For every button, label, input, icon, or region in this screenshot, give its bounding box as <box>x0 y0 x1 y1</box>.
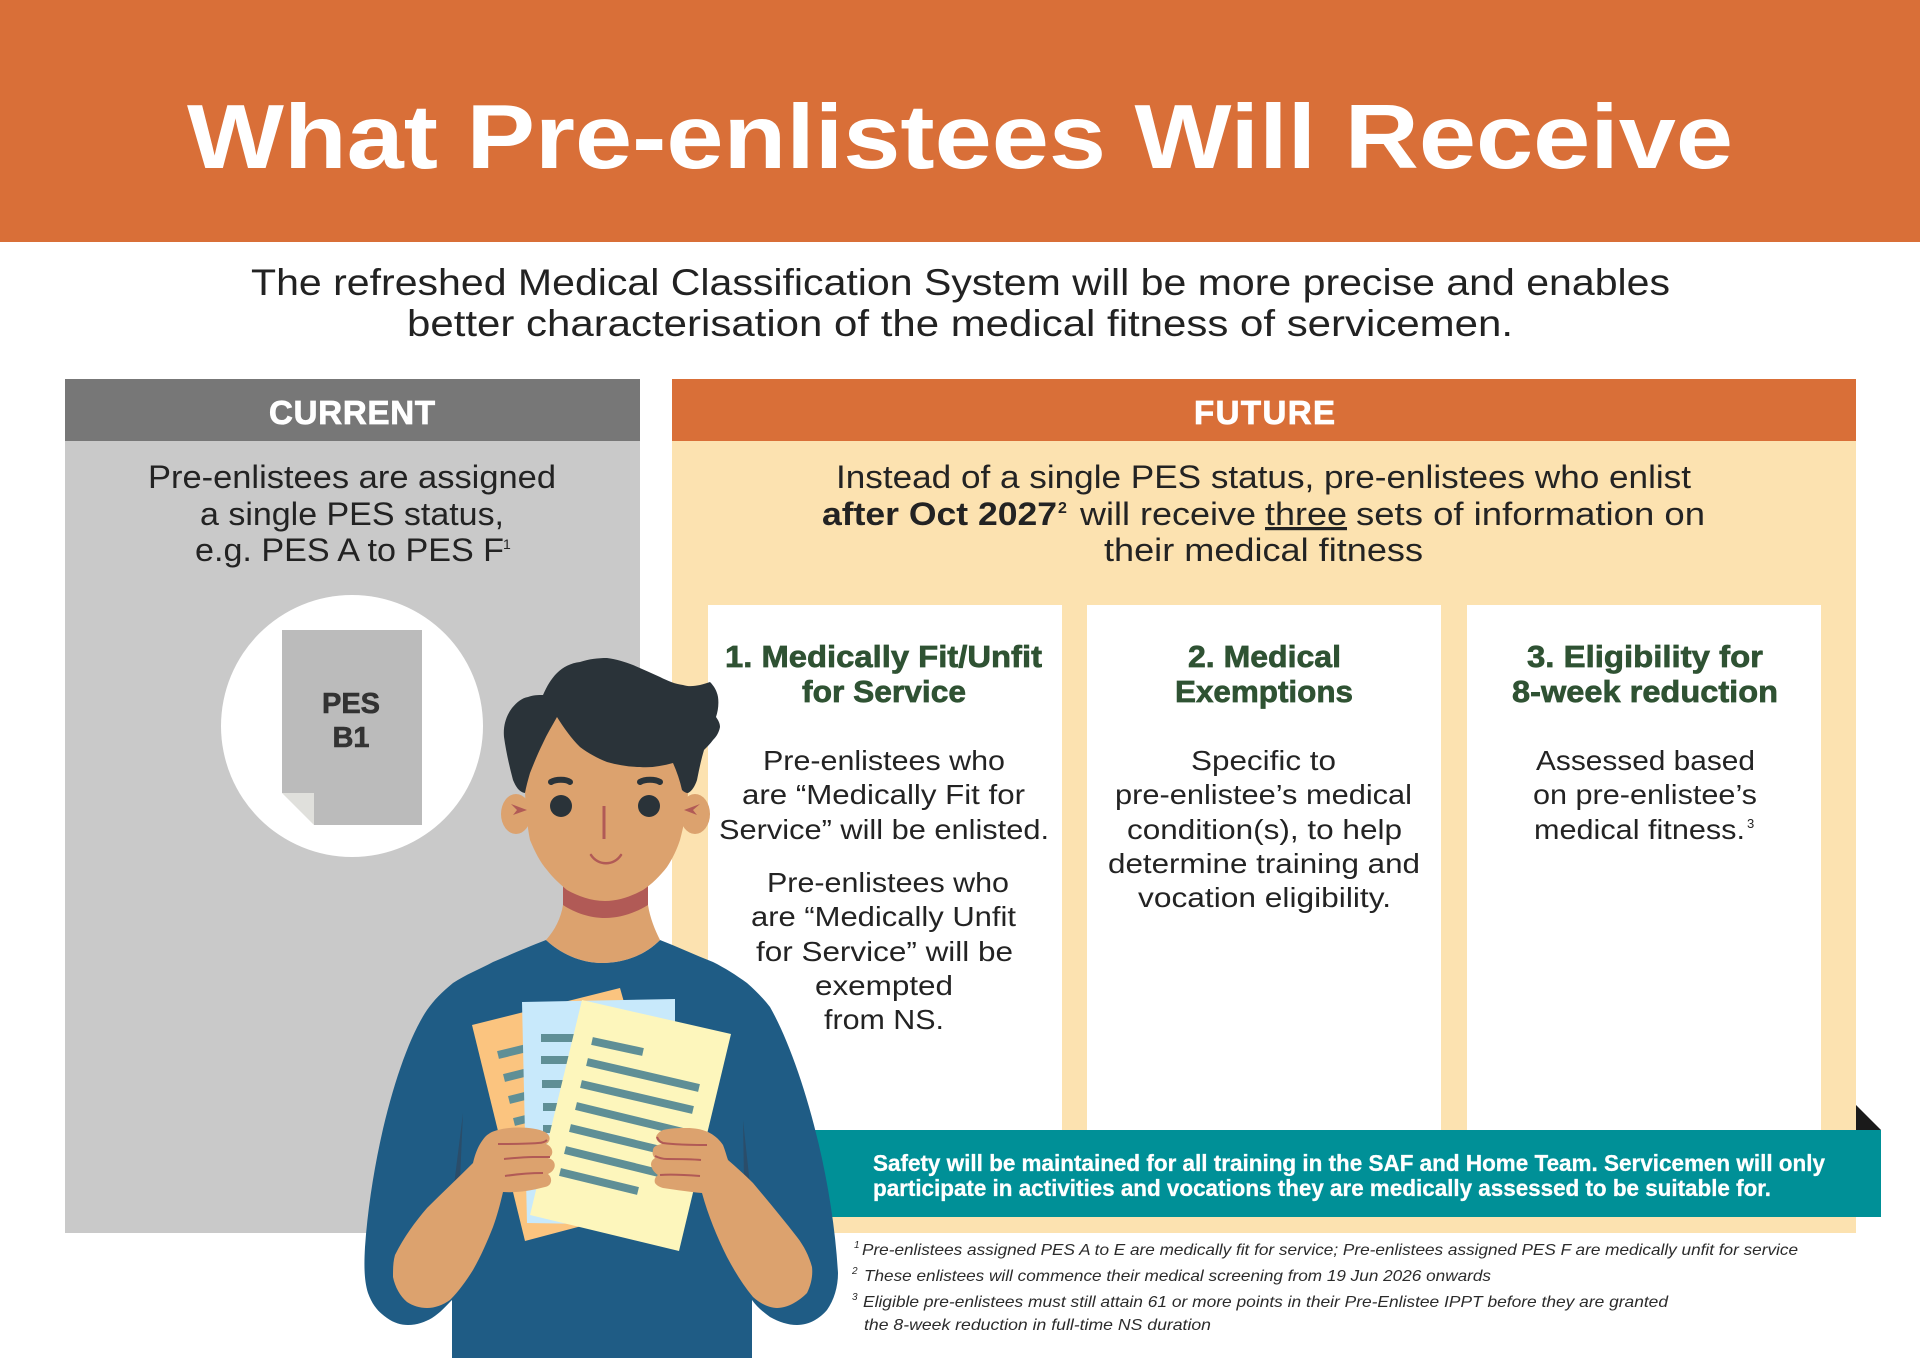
right hand and arm <box>651 1128 812 1308</box>
footnotes: Pre-enlistees assigned PES A to E are medically fit for service; Pre-enlistees assigned PES F are medically unfit for service <box>862 1242 1798 1259</box>
neck <box>546 880 660 963</box>
icon: banner fold <box>1856 1105 1881 1130</box>
card 1: medically fit or unfit: for Service” will be <box>756 936 1013 967</box>
title banner <box>0 0 1920 242</box>
mouth <box>591 855 621 863</box>
icon: PES document in circle: PES <box>322 688 380 720</box>
card 1: medically fit or unfit: 1. Medically Fit/Unfit <box>725 639 1042 674</box>
future description <box>822 459 1705 568</box>
subtitle <box>251 262 1670 344</box>
card 1: medically fit or unfit: from NS. <box>824 1004 944 1035</box>
footnotes: These enlistees will commence their medical screening from 19 Jun 2026 onwards <box>864 1268 1491 1285</box>
nose <box>602 806 606 839</box>
current header: CURRENT <box>269 394 435 431</box>
card 3: eligibility for 8-week reduction <box>1467 605 1821 1130</box>
current description <box>148 459 556 568</box>
title: What Pre-enlistees Will Receive <box>187 87 1733 188</box>
panel: future <box>672 379 1856 1233</box>
card 1: medically fit or unfit: Pre-enlistees who <box>767 867 1009 898</box>
card 1: medically fit or unfit: Service” will be enlisted. <box>719 814 1049 845</box>
future description: Instead of a single PES status, pre-enlistees who enlist <box>836 459 1691 495</box>
document: orange sheet <box>472 988 680 1241</box>
card 2: medical exemptions: 2. Medical <box>1188 639 1341 674</box>
card 1: medically fit or unfit: are “Medically Fit for <box>742 779 1025 810</box>
footnotes: 2 <box>851 1266 858 1277</box>
card 3: eligibility for 8-week reduction: Assessed based <box>1536 745 1755 776</box>
card 1: medically fit or unfit: are “Medically Unfit <box>751 901 1016 932</box>
callout: safety banner <box>800 1130 1881 1217</box>
future description: sets of information on <box>1356 496 1705 532</box>
card 3: eligibility for 8-week reduction: 3. Eligibility for <box>1527 639 1763 674</box>
future description: their medical fitness <box>1104 532 1423 568</box>
future header: FUTURE <box>1194 394 1335 431</box>
footnotes: 1 <box>854 1240 860 1251</box>
document: blue sheet <box>522 999 675 1225</box>
eyes <box>550 795 660 817</box>
card 3: eligibility for 8-week reduction: medical fitness. <box>1534 814 1745 845</box>
card 2: medical exemptions: Exemptions <box>1175 674 1353 709</box>
footnotes: the 8-week reduction in full-time NS duration <box>864 1317 1211 1334</box>
card 3: eligibility for 8-week reduction: on pre-enlistee’s <box>1533 779 1757 810</box>
callout: safety banner: Safety will be maintained for all training in the SAF and Home Team. Servicemen will only <box>873 1150 1825 1176</box>
icon: PES document in circle: B1 <box>332 722 370 754</box>
footnotes: Eligible pre-enlistees must still attain 61 or more points in their Pre-Enlistee IPPT before they are granted <box>863 1294 1669 1311</box>
future description: 2 <box>1058 500 1067 517</box>
document: yellow sheet <box>530 1000 731 1251</box>
panel: current <box>65 379 640 1233</box>
card 2: medical exemptions <box>1087 605 1441 1130</box>
card 2: medical exemptions: condition(s), to help <box>1127 814 1402 845</box>
card 3: eligibility for 8-week reduction: 8-week reduction <box>1512 674 1778 709</box>
current description: 1 <box>503 536 511 552</box>
card 1: medically fit or unfit: Pre-enlistees who <box>763 745 1005 776</box>
card 2: medical exemptions: vocation eligibility. <box>1138 882 1391 913</box>
subtitle: better characterisation of the medical fitness of servicemen. <box>407 303 1513 344</box>
callout: safety banner: participate in activities and vocations they are medically assessed to be suitable for. <box>873 1175 1771 1201</box>
current description: Pre-enlistees are assigned <box>148 459 556 495</box>
left hand and arm <box>393 1128 555 1308</box>
current description: e.g. PES A to PES F <box>195 532 504 568</box>
subtitle: The refreshed Medical Classification System will be more precise and enables <box>251 262 1670 303</box>
future header <box>672 379 1856 441</box>
icon: PES document in circle <box>221 595 483 857</box>
illustration: person holding documents <box>364 658 838 1358</box>
hair <box>504 658 720 793</box>
current description: a single PES status, <box>200 496 504 532</box>
footnotes: 3 <box>852 1292 858 1303</box>
collar shadow <box>563 880 648 918</box>
card 2: medical exemptions: determine training and <box>1108 848 1420 879</box>
face <box>525 700 688 901</box>
future description: three <box>1265 496 1347 532</box>
shirt <box>364 940 838 1358</box>
card 2: medical exemptions: pre-enlistee’s medical <box>1115 779 1412 810</box>
card 2: medical exemptions: Specific to <box>1191 745 1336 776</box>
card 1: medically fit or unfit <box>708 605 1062 1130</box>
card 1: medically fit or unfit: exempted <box>815 970 953 1001</box>
card 3: eligibility for 8-week reduction: 3 <box>1747 816 1754 831</box>
inner ear marks <box>511 804 700 815</box>
current header <box>65 379 640 441</box>
footnotes <box>851 1240 1798 1334</box>
ears <box>501 794 710 834</box>
future description: will receive <box>1079 496 1256 532</box>
card 1: medically fit or unfit: for Service <box>802 674 966 709</box>
future description: after Oct 2027 <box>822 496 1057 532</box>
shirt creases <box>454 1113 750 1185</box>
eyebrows <box>551 780 660 782</box>
